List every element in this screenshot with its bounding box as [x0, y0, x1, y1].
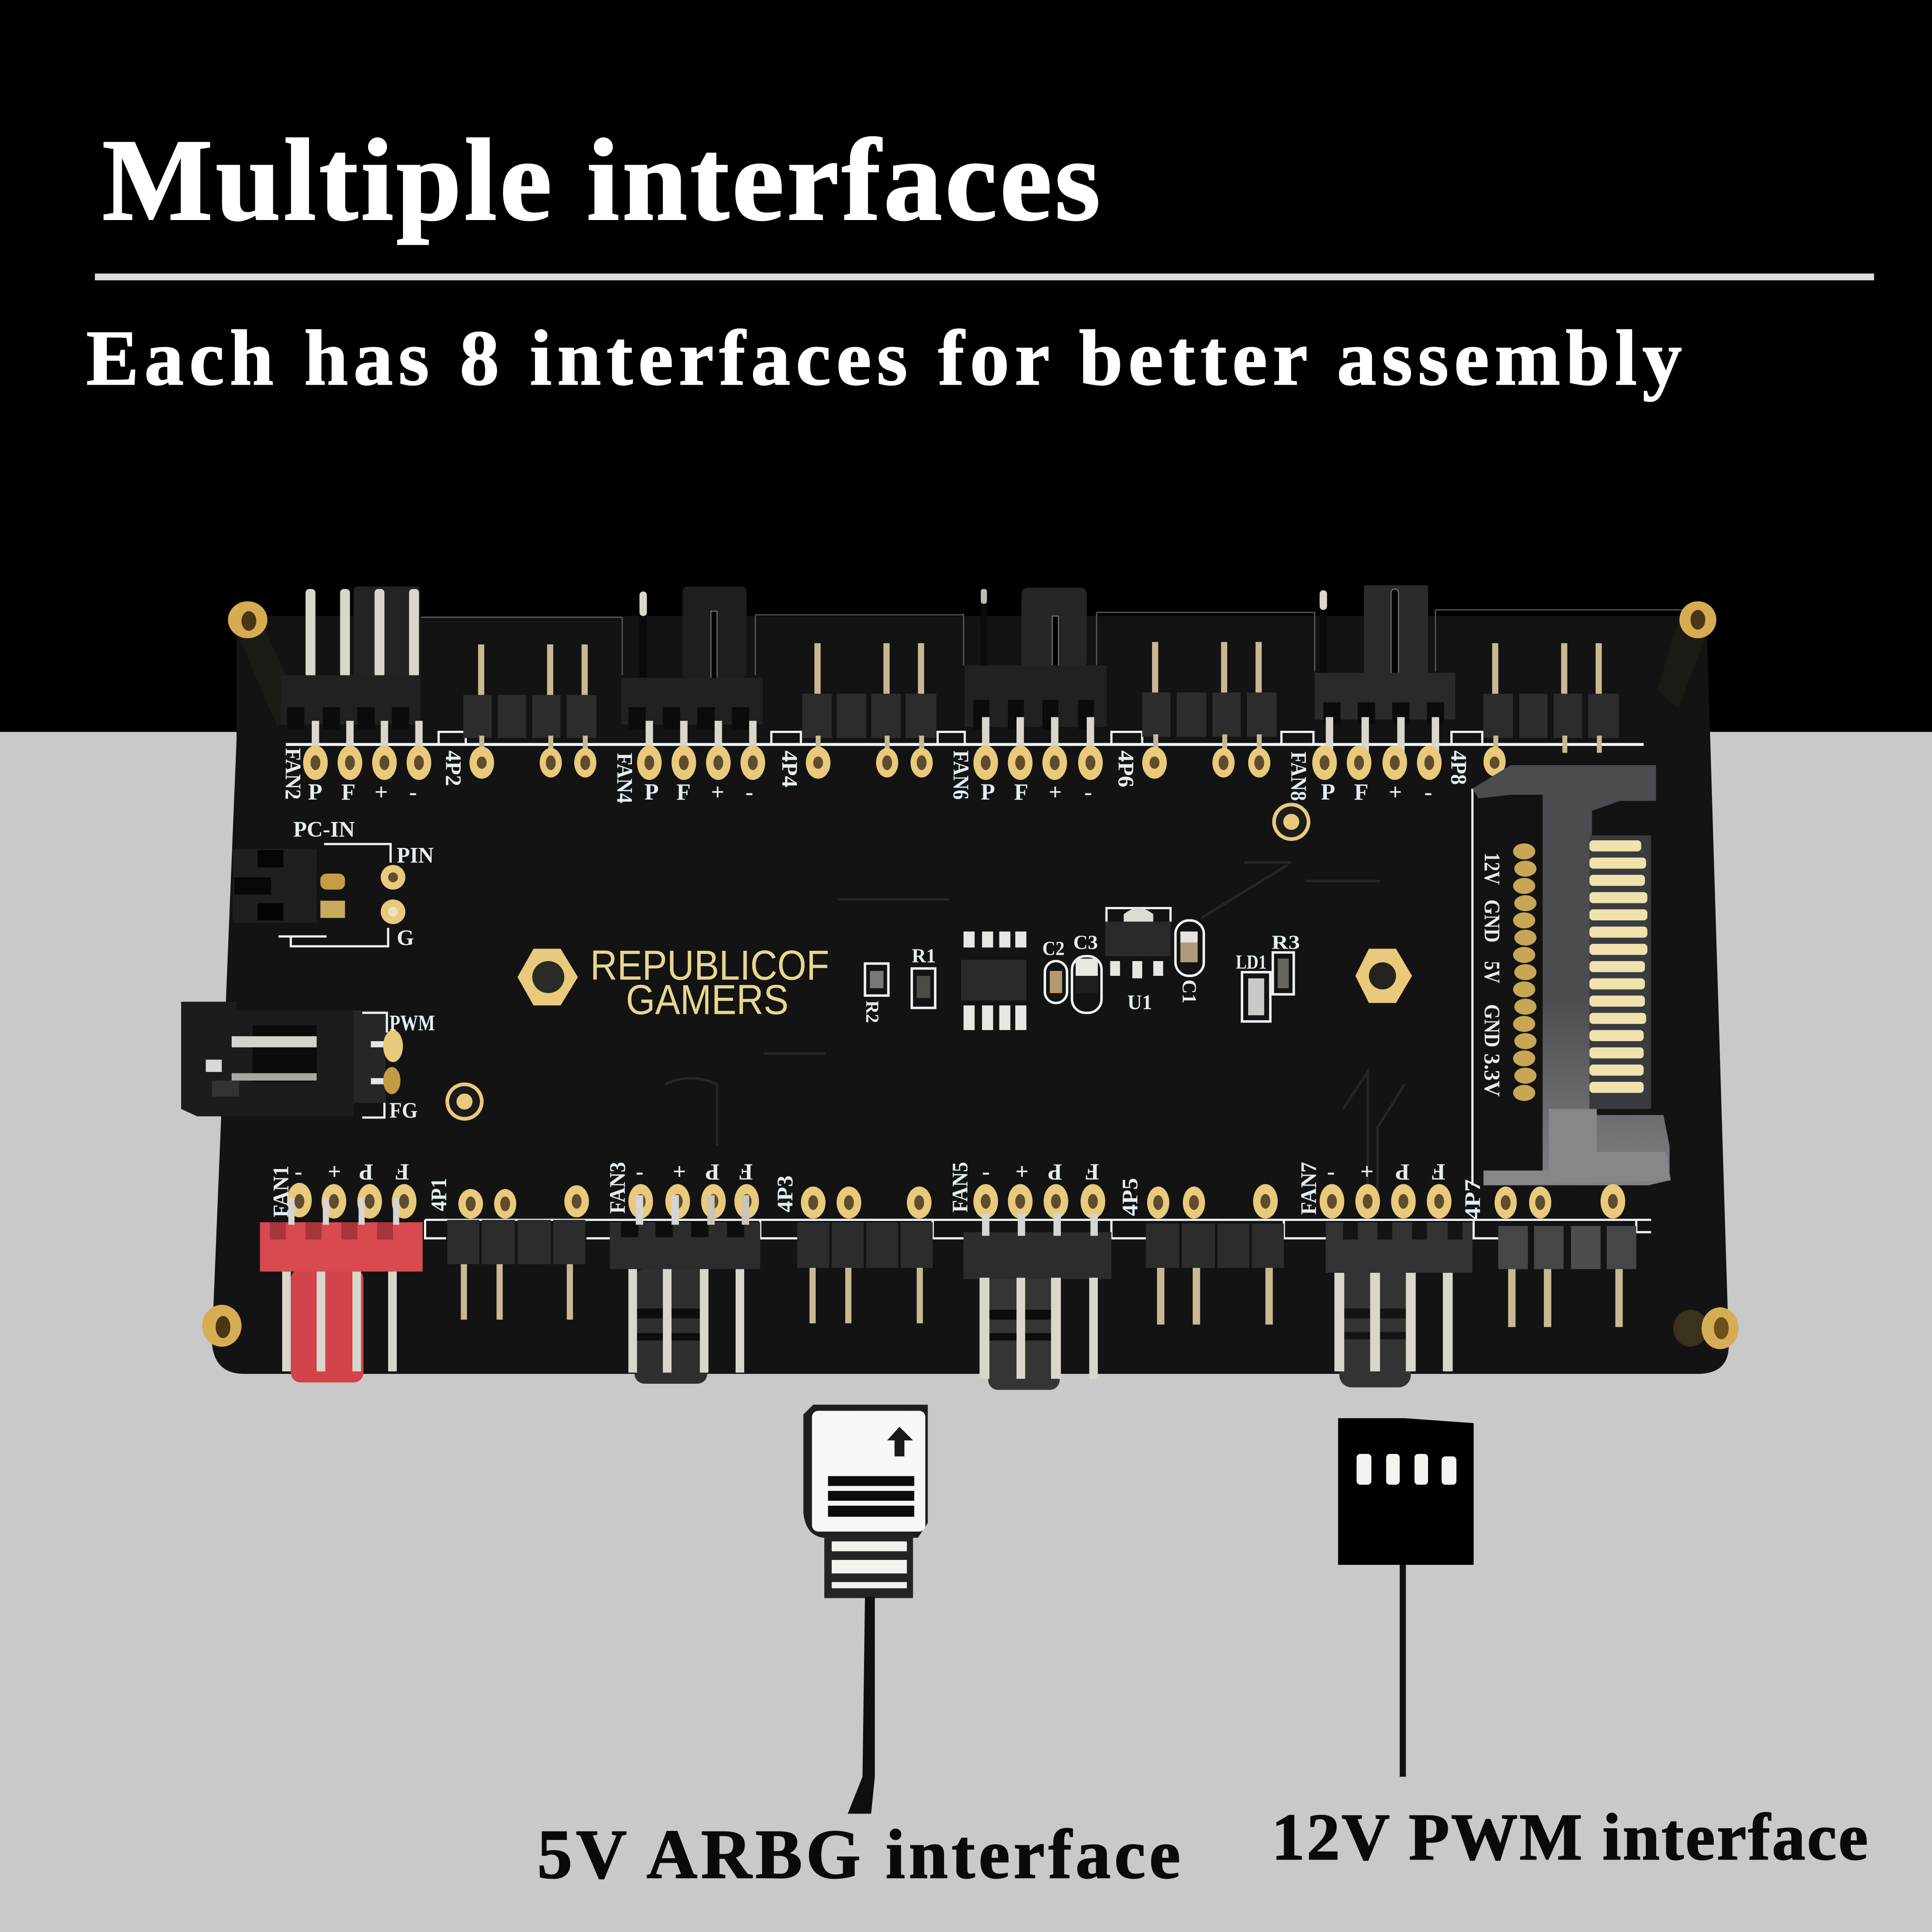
bottom silkscreen labels: F [395, 1159, 409, 1185]
title: Multiple interfaces [102, 115, 1100, 245]
connector FAN4 top [621, 586, 763, 755]
top silkscreen labels: FAN2 [281, 748, 305, 800]
PWM connector [181, 1002, 435, 1123]
wire [1400, 1565, 1406, 1777]
bottom silkscreen labels: FAN7 [1296, 1162, 1321, 1215]
capacitors C2 C3: C3 [1073, 931, 1098, 953]
label 12V PWM: 12V PWM interface [1271, 1800, 1868, 1874]
standoff top left [228, 601, 302, 727]
regulator U1 [1105, 908, 1170, 1014]
icon: 12V PWM connector [1338, 1418, 1474, 1777]
component LD1 [1236, 951, 1271, 1021]
bottom silkscreen labels: FAN1 [269, 1165, 293, 1217]
PC-IN connector: G [397, 925, 414, 950]
connector 4P7 [1498, 1226, 1636, 1327]
SATA solder row [1513, 843, 1537, 1101]
capacitors C2 C3 [1042, 931, 1102, 1013]
icon: 5V ARGB connector [803, 1405, 928, 1814]
component R2: R2 [862, 1000, 883, 1023]
SATA contact back [1589, 835, 1651, 1109]
top silkscreen labels: - [746, 779, 753, 805]
bottom silkscreen labels: F [1431, 1159, 1445, 1185]
standoff bottom left [202, 1305, 242, 1347]
connector 4P4 top [802, 643, 936, 753]
bottom silkscreen labels: F [738, 1159, 753, 1185]
PWM connector: PWM [390, 1010, 435, 1035]
top silkscreen labels: 4P6 [1114, 750, 1139, 788]
top silkscreen labels: 4P8 [1447, 750, 1471, 785]
connector stem [824, 1534, 913, 1598]
SATA voltage labels: GND [1480, 1004, 1504, 1047]
divider rule [95, 274, 1874, 280]
board top edge highlights [421, 610, 1694, 675]
bottom silkscreen labels: 4P3 [773, 1175, 797, 1212]
bottom silkscreen labels: P [359, 1159, 373, 1185]
top silkscreen labels: - [1424, 779, 1432, 805]
bottom silkscreen labels [269, 1159, 1485, 1220]
SATA voltage labels: 3.3V [1480, 1054, 1504, 1097]
PC-IN connector: PIN [397, 843, 434, 868]
bottom silkscreen labels: + [1015, 1159, 1029, 1185]
bottom silkscreen labels: FAN3 [605, 1162, 630, 1214]
connector FAN7 [1326, 1222, 1472, 1387]
connector FAN8 top [1315, 585, 1455, 754]
PC-IN connector: PC-IN [293, 817, 355, 842]
logo text: REPUBLICOF [590, 941, 829, 988]
silkscreen rail bottom [425, 1220, 1651, 1238]
component R1 [912, 945, 936, 1008]
top silkscreen labels: FAN4 [612, 753, 637, 803]
top silkscreen labels: F [1354, 779, 1368, 805]
stripes on face [828, 1476, 914, 1517]
component R3 [1271, 931, 1300, 994]
top silkscreen labels: P [981, 779, 995, 805]
top silkscreen labels: + [375, 779, 388, 805]
top silkscreen labels: F [341, 779, 356, 805]
mounting pad right [1272, 803, 1310, 841]
PWM connector: FG [390, 1098, 418, 1123]
top silkscreen labels: F [1014, 779, 1028, 805]
board outline [212, 616, 1729, 1374]
logo text: GAMERS [626, 976, 788, 1023]
connector head [803, 1405, 928, 1538]
SATA voltage labels: 5V [1480, 961, 1504, 983]
bottom silkscreen labels: FAN5 [948, 1162, 972, 1212]
bottom silkscreen labels: + [1360, 1159, 1373, 1185]
connector FAN1 red [260, 1198, 423, 1382]
bottom silkscreen labels: + [328, 1159, 341, 1185]
standoff bottom right [1673, 1307, 1738, 1349]
bottom silkscreen labels: + [673, 1159, 686, 1185]
SATA silk outline [1472, 788, 1473, 1185]
connector 4P6 top [1142, 642, 1276, 752]
top silkscreen labels: P [1321, 779, 1335, 805]
silkscreen rail top [286, 743, 1644, 746]
capacitor C1 [1175, 920, 1204, 1004]
SATA voltage labels [1480, 853, 1504, 1097]
bottom silkscreen labels: F [1085, 1159, 1099, 1185]
connector 4P3 [797, 1222, 933, 1323]
connector 4P5 [1146, 1224, 1284, 1325]
connector white face [812, 1411, 925, 1532]
subtitle: Each has 8 interfaces for better assembly [86, 315, 1682, 402]
top silkscreen labels: 4P2 [441, 750, 466, 786]
top silkscreen labels: - [1084, 779, 1092, 805]
connector 4P2 top [463, 644, 596, 753]
component R2 [862, 963, 888, 1023]
SATA housing [1472, 765, 1669, 1185]
top silkscreen labels [281, 748, 1471, 805]
connector FAN6 top [965, 588, 1106, 754]
bottom solder pads [287, 1183, 1625, 1219]
standoff top right [1657, 601, 1716, 708]
top silkscreen labels: P [644, 779, 659, 805]
circuit board [181, 585, 1738, 1390]
capacitors C2 C3: C2 [1042, 937, 1064, 959]
SATA voltage labels: GND [1480, 899, 1504, 943]
bottom silkscreen labels: - [294, 1159, 302, 1185]
PC-IN connector [233, 817, 434, 950]
bottom silkscreen labels: - [982, 1159, 990, 1185]
connector FAN5 [963, 1214, 1111, 1390]
arrow glyph [887, 1427, 913, 1457]
logo hex nut [517, 949, 578, 1005]
connector FAN2 top [281, 586, 423, 758]
label 5V ARBG: 5V ARBG interface [537, 1815, 1180, 1893]
connector 4P1 [447, 1220, 585, 1320]
wire [848, 1597, 875, 1814]
top silkscreen labels: 4P4 [777, 750, 802, 788]
capacitor C1: C1 [1178, 979, 1200, 1004]
mounting pad left [445, 1082, 483, 1121]
stem windows [832, 1542, 907, 1588]
SATA lower lighter end [1483, 1109, 1671, 1185]
top silkscreen labels: - [409, 779, 417, 805]
top silk boxes [439, 732, 1482, 744]
top silkscreen labels: + [1049, 779, 1062, 805]
top silkscreen labels: FAN6 [949, 750, 973, 800]
logo text [590, 941, 829, 1023]
bottom silkscreen labels: 4P5 [1118, 1178, 1142, 1216]
connector 4P8 top [1483, 643, 1619, 753]
top silkscreen labels: + [1389, 779, 1402, 805]
top solder pads [303, 746, 1506, 780]
connector FAN3 [610, 1195, 760, 1384]
regulator U1: U1 [1127, 991, 1152, 1014]
background: gray lower band [0, 732, 1932, 1932]
SATA power connector [1472, 765, 1671, 1185]
bottom silkscreen labels: 4P7 [1460, 1179, 1485, 1220]
component LD1: LD1 [1236, 951, 1267, 973]
bottom silkscreen labels: - [636, 1159, 644, 1185]
background: black upper band [0, 0, 1932, 732]
bottom silkscreen labels: P [1395, 1159, 1410, 1185]
bottom silkscreen labels: - [1327, 1159, 1335, 1185]
SATA contact strips [1589, 840, 1648, 1093]
top silkscreen labels: + [711, 779, 724, 805]
chip IC [961, 932, 1026, 1030]
component R1: R1 [912, 945, 936, 967]
bottom silkscreen labels: P [705, 1159, 720, 1185]
SATA voltage labels: 12V [1480, 853, 1504, 885]
bottom silkscreen labels: 4P1 [426, 1178, 451, 1211]
faint traces [665, 863, 1405, 1214]
top silkscreen labels: F [677, 779, 691, 805]
hex nut right [1356, 949, 1412, 1003]
component R3: R3 [1271, 931, 1300, 953]
black connector body [1338, 1418, 1474, 1565]
bottom silkscreen labels: P [1048, 1159, 1062, 1185]
top silkscreen labels: FAN8 [1286, 752, 1311, 801]
pin windows [1356, 1454, 1457, 1485]
top silkscreen labels: P [308, 779, 322, 805]
